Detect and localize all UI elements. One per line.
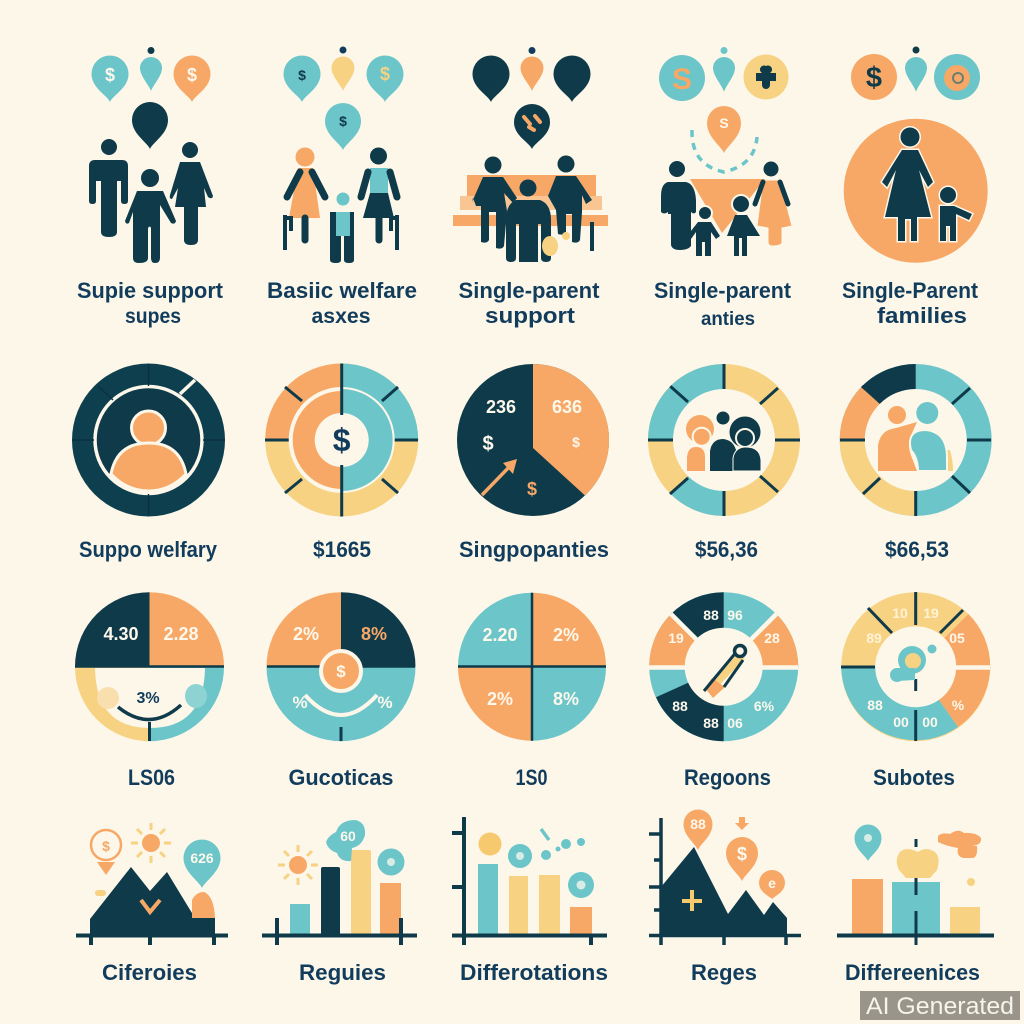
- panel: singpopanties pie: [457, 364, 609, 562]
- label: Basiic welfare: [267, 278, 417, 303]
- icon: small down arrow: [735, 817, 749, 830]
- panel: gucoticas pie: [266, 592, 416, 790]
- icon: orange dollar pin: S: [719, 115, 729, 131]
- dashed arc: [692, 130, 757, 172]
- icon: family on chairs: [283, 148, 399, 263]
- icon: small teal pin: [713, 47, 735, 92]
- chart: quadrant pie with smile: 2.28: [163, 624, 199, 644]
- chart: segmented ring with two people: [840, 364, 992, 516]
- label: Suppo welfary: [79, 537, 218, 562]
- panel: differotations bar chart: [452, 817, 608, 985]
- icon: orange circle with dollar: $: [866, 62, 882, 94]
- chart: segmented ring: 05: [949, 630, 965, 646]
- chart: two-slice pie: $: [572, 434, 580, 450]
- chart: segmented ring: [841, 592, 990, 741]
- icon: yellow circle with puzzle: [744, 54, 788, 100]
- chart: segmented ring: 28: [764, 630, 780, 646]
- icon: dark pin: [132, 102, 168, 149]
- badge: AI Generated: AI Generated: [866, 993, 1014, 1020]
- chart: mountain: [649, 818, 801, 945]
- label line two: supes: [125, 305, 181, 328]
- panel: $66,53 ring: [840, 364, 992, 562]
- label: Single-parent: [654, 278, 792, 303]
- chart: quadrant pie with coin: %: [377, 693, 393, 712]
- icon: teal pin right: $: [380, 64, 390, 84]
- chart: quadrant pie with smile: 4.30: [103, 624, 139, 644]
- icon: orange dollar pin: $: [187, 65, 197, 85]
- label: Reguies: [299, 960, 386, 985]
- icon: teal circle with orange dollar: S: [672, 63, 692, 96]
- chart: segmented ring: 89: [866, 630, 882, 646]
- panel: LS06 pie: [75, 592, 224, 790]
- icon: teal pin centre: [325, 103, 361, 150]
- chart: four quadrant pie: 8%: [553, 689, 579, 709]
- chart: segmented ring: 88: [672, 698, 688, 714]
- icon: orange badge: [91, 830, 121, 896]
- icon: pin 1: 88: [690, 816, 706, 832]
- chart: two-slice pie: [457, 364, 609, 516]
- panel: single-parent families: [842, 46, 988, 328]
- chart: segmented ring: 06: [727, 715, 743, 731]
- icon: small teal pin: [140, 47, 162, 91]
- panel: 1S0 pie: [458, 593, 606, 790]
- label line two: anties: [701, 309, 755, 330]
- chart: segmented ring with dollar: [265, 364, 418, 516]
- icon: teal circle with spiral: [934, 54, 980, 100]
- label: LS06: [128, 765, 175, 790]
- label: Differeenices: [845, 960, 980, 985]
- label: $1665: [313, 537, 371, 562]
- panel: support welfary ring: [72, 364, 225, 562]
- icon: small teal pin: [905, 46, 927, 92]
- chart: segmented ring with family: [648, 364, 800, 516]
- chart: segmented ring: 19: [923, 605, 939, 621]
- label: $66,53: [885, 537, 949, 562]
- chart: four quadrant pie: 2%: [487, 689, 513, 709]
- chart: quadrant pie with coin: $: [336, 662, 346, 681]
- chart: bars: [452, 817, 607, 945]
- icon: teal swirl: [890, 644, 936, 682]
- icon: dark pin centre: [514, 104, 550, 149]
- label: 1S0: [516, 765, 548, 790]
- icon: sun: [131, 823, 171, 863]
- icon: two people: [878, 402, 953, 471]
- chart: quadrant pie with coin: 2%: [293, 624, 319, 644]
- icon: teal pin: [184, 840, 220, 888]
- icon: teal pin: [854, 824, 882, 861]
- label line two: families: [877, 303, 967, 328]
- chart: segmented ring: 10: [892, 605, 908, 621]
- icon: teal circle: [378, 848, 404, 876]
- label: Single-parent: [458, 278, 600, 303]
- chart: segmented ring: %: [952, 697, 965, 713]
- chart: two-slice pie: 236: [486, 397, 516, 417]
- icon: teal dollar pin: $: [105, 65, 115, 85]
- icon: teal pin left: $: [298, 67, 306, 83]
- icon: teal pin centre: $: [339, 113, 347, 129]
- label line two: support: [485, 303, 576, 328]
- icon: dark pin right: [554, 56, 590, 102]
- icon: teal pin right: [366, 56, 404, 102]
- chart: bars: [262, 850, 417, 945]
- label line two: asxes: [312, 305, 370, 328]
- icon: pin 3: [759, 870, 785, 899]
- icon: orange dollar pin: [174, 56, 210, 102]
- chart: segmented ring: 88: [703, 607, 719, 623]
- chart: mountain: [76, 867, 228, 945]
- icon: pin tool: [704, 646, 746, 698]
- chart: dark ring with person: [72, 364, 225, 516]
- icon: teal pin: 626: [190, 850, 214, 866]
- chart: segmented ring: 88: [867, 697, 883, 713]
- icon: orange badge: $: [102, 838, 110, 854]
- panel: reguies bar chart: [262, 820, 417, 985]
- icon: big orange circle: [844, 119, 988, 263]
- icon: teal speech blob: 60: [340, 828, 356, 844]
- chart: segmented ring: 6%: [754, 698, 775, 714]
- panel: ciferoies mountain chart: [76, 823, 228, 985]
- label: Subotes: [873, 765, 955, 790]
- panel: single-parent support: [453, 47, 608, 328]
- chart: segmented ring: 00: [893, 714, 909, 730]
- label: Regoons: [684, 765, 771, 790]
- chart: quadrant pie with coin: 8%: [361, 624, 387, 644]
- chart: segmented ring: 88: [703, 715, 719, 731]
- label: Single-Parent: [842, 278, 979, 303]
- label: Ciferoies: [102, 960, 197, 985]
- chart: segmented ring: [649, 592, 798, 741]
- icon: orange dollar pin: [707, 106, 741, 153]
- icon: small yellow pin: [332, 46, 354, 91]
- icon: teal dollar pin: [92, 56, 128, 102]
- icon: teal circle with orange dollar: [659, 55, 705, 101]
- chart: four quadrant pie: 2%: [553, 625, 579, 645]
- label: Singpopanties: [459, 537, 609, 562]
- icon: sun: [278, 845, 318, 885]
- icon: pin 1: [684, 810, 712, 850]
- panel: $1665 ring: [265, 364, 418, 562]
- chart: four quadrant pie: 2.20: [482, 625, 518, 645]
- panel: subotes ring: [841, 592, 990, 790]
- panel: reges mountain chart: [649, 810, 801, 985]
- icon: circles and dots: [478, 829, 594, 898]
- panel: basic welfare: [267, 46, 417, 328]
- chart: quadrant pie with coin: [266, 592, 416, 741]
- chart: bars: [837, 839, 994, 945]
- chart: two-slice pie: $: [482, 433, 494, 455]
- icon: pin 2: $: [737, 844, 747, 864]
- chart: quadrant pie with smile: 3%: [136, 690, 160, 707]
- icon: pin 3: e: [768, 875, 776, 891]
- chart: segmented ring: 96: [727, 607, 743, 623]
- label: $56,36: [695, 537, 758, 562]
- panel: differeenices bar chart: [837, 824, 994, 985]
- icon: orange circle with dollar: [851, 54, 897, 100]
- chart: quadrant pie with coin: %: [292, 693, 308, 712]
- panel: supie support: [77, 47, 224, 328]
- panel: $56,36 ring: [648, 364, 800, 562]
- panel: single-parent amities: [654, 47, 792, 330]
- chart: segmented ring with dollar: $: [333, 422, 351, 458]
- icon: small orange pin: [520, 47, 544, 91]
- chart: quadrant pie with smile: [75, 592, 224, 741]
- icon: orange cloud: [938, 831, 981, 858]
- chart: two-slice pie: $: [527, 479, 537, 499]
- chart: segmented ring: 19: [668, 630, 684, 646]
- icon: yellow heart: [897, 849, 939, 878]
- chart: segmented ring: 00: [922, 714, 938, 730]
- icon: teal speech blob: [326, 820, 365, 861]
- icon: family with triangle: [661, 161, 792, 256]
- icon: yellow dot: [967, 878, 975, 886]
- icon: family of three: [89, 139, 213, 263]
- icon: family: [686, 412, 761, 471]
- icon: teal pin left: [284, 56, 320, 102]
- label: Reges: [691, 960, 757, 985]
- icon: pin 2: [726, 837, 758, 881]
- label: Gucoticas: [288, 765, 394, 790]
- icon: dark pin left: [472, 56, 510, 102]
- label: Differotations: [460, 960, 608, 985]
- icon: family on bench: [453, 156, 608, 262]
- icon: mother and child: [882, 128, 972, 241]
- chart: four quadrant pie: [458, 593, 606, 741]
- panel: regoons ring: [649, 592, 798, 790]
- chart: two-slice pie: 636: [552, 397, 582, 417]
- label: Supie support: [77, 278, 224, 303]
